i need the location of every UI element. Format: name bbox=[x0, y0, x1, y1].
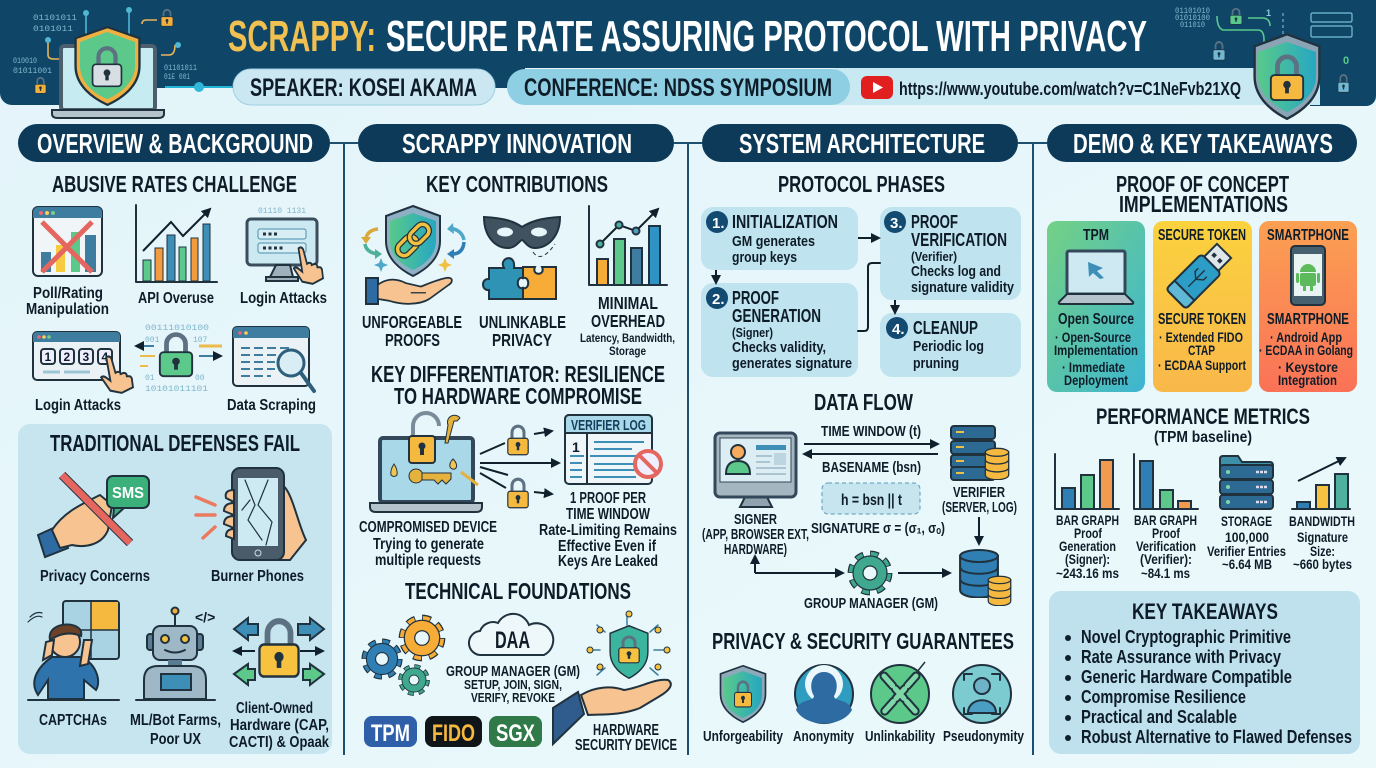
header banner bbox=[0, 0, 1376, 106]
label bbox=[1134, 512, 1197, 581]
icon: green lock with binary: 00111010100 bbox=[145, 324, 209, 333]
guarantee labels bbox=[703, 729, 1024, 745]
label: COMPROMISED DEVICE bbox=[359, 519, 497, 536]
label: STORAGE bbox=[1221, 513, 1272, 529]
icon: verifier server bbox=[951, 426, 1009, 480]
phase arrows bbox=[716, 238, 895, 331]
phase 1: initialization: 1. bbox=[712, 215, 725, 232]
icon: robot: </> bbox=[195, 609, 215, 625]
label: PROOFS bbox=[385, 330, 440, 350]
header banner: 1 bbox=[1266, 8, 1271, 18]
phase 3: proof verification bbox=[880, 207, 1021, 300]
card: secure token: SECURE TOKEN bbox=[1158, 311, 1246, 328]
card: secure token: · Extended FIDO bbox=[1159, 329, 1243, 345]
label: Burner Phones bbox=[211, 568, 304, 585]
icon: overhead chart bbox=[589, 206, 667, 285]
badge: TPM: TPM bbox=[371, 720, 410, 747]
icon: verifier log bbox=[565, 415, 661, 484]
label bbox=[446, 664, 580, 705]
header banner: 01101010 bbox=[1175, 7, 1210, 16]
icon: compromised laptop bbox=[370, 413, 482, 512]
icon: green lock with binary: 10101011101 bbox=[145, 385, 208, 394]
heading: key contributions: KEY CONTRIBUTIONS bbox=[426, 171, 608, 197]
icon: cracked burner phone bbox=[196, 468, 306, 560]
heading: performance metrics bbox=[1096, 404, 1310, 446]
heading: guarantees: PRIVACY & SECURITY GUARANTEES bbox=[712, 628, 1014, 654]
label: Login Attacks bbox=[35, 397, 121, 414]
panel: key takeaways: Novel Cryptographic Primitive bbox=[1081, 627, 1291, 647]
header banner: 01101011 bbox=[164, 64, 197, 73]
phase 1: initialization: group keys bbox=[732, 249, 797, 266]
icon: poll manipulation bbox=[33, 207, 102, 276]
phase 1: initialization bbox=[701, 207, 858, 270]
label bbox=[702, 511, 809, 558]
label: Manipulation bbox=[26, 301, 109, 318]
icon: android phone bbox=[1291, 246, 1325, 305]
badge: FIDO bbox=[425, 716, 482, 747]
hash formula box bbox=[822, 483, 920, 514]
icon: frustrated person captcha bbox=[28, 601, 119, 700]
icon: USB token bbox=[1166, 241, 1234, 309]
label: Storage bbox=[609, 346, 646, 358]
phase 3: proof verification: PROOF bbox=[911, 212, 958, 232]
label bbox=[130, 712, 221, 748]
icon: login keypad bbox=[33, 332, 133, 393]
icon: anonymity bbox=[795, 665, 853, 724]
label bbox=[1056, 512, 1119, 581]
icon: hardware security device bbox=[553, 611, 671, 744]
phase 4: cleanup: CLEANUP bbox=[913, 318, 978, 338]
icon: SMS hand bbox=[38, 475, 149, 557]
card: TPM: Open Source bbox=[1058, 311, 1134, 328]
label: Login Attacks bbox=[240, 290, 327, 307]
dividers between columns bbox=[330, 143, 1047, 755]
guarantee labels: Unforgeability bbox=[703, 729, 783, 745]
phase 1: initialization: INITIALIZATION bbox=[732, 212, 838, 232]
signature label: SIGNATURE σ = (σ₁, σₒ) bbox=[811, 520, 945, 537]
label: SECURITY DEVICE bbox=[575, 737, 677, 754]
card: TPM bbox=[1047, 221, 1145, 392]
column header: architecture bbox=[702, 124, 1018, 162]
label bbox=[26, 285, 109, 318]
label: Data Scraping bbox=[227, 397, 316, 414]
card: smartphone: · Android App bbox=[1270, 329, 1342, 345]
heading: technical foundations: TECHNICAL FOUNDATIONS bbox=[405, 578, 631, 604]
card: smartphone: Integration bbox=[1278, 372, 1337, 388]
badge: FIDO: FIDO bbox=[432, 720, 475, 747]
card: smartphone bbox=[1259, 221, 1357, 392]
arrows and locks to verifier log bbox=[480, 426, 559, 508]
phase 2: proof generation: 2. bbox=[712, 291, 725, 308]
label: (SERVER, LOG) bbox=[942, 499, 1017, 516]
chart: bandwidth bbox=[1292, 458, 1350, 509]
label: BAR GRAPH bbox=[1056, 512, 1119, 528]
label: TIME WINDOW bbox=[566, 506, 651, 523]
card: secure token: SECURE TOKEN bbox=[1158, 227, 1246, 244]
icon: robot bbox=[136, 608, 215, 700]
card: TPM: Implementation bbox=[1054, 342, 1138, 358]
phase 2: proof generation: GENERATION bbox=[732, 306, 821, 326]
label bbox=[362, 312, 462, 350]
label: Generation bbox=[1059, 538, 1116, 554]
icon: green lock with binary: 00 bbox=[195, 374, 205, 383]
label: SIGNER bbox=[734, 511, 777, 528]
header banner: 01011001 bbox=[13, 67, 52, 76]
icon: green lock with binary bbox=[136, 324, 222, 394]
heading: key differentiator bbox=[371, 361, 665, 409]
heading: proof of concept: PROOF OF CONCEPT bbox=[1116, 171, 1289, 197]
icon: unforgeability shield bbox=[720, 666, 766, 722]
speaker pill: SPEAKER: KOSEI AKAMA bbox=[250, 74, 477, 102]
label bbox=[359, 519, 497, 569]
label: BAR GRAPH bbox=[1134, 512, 1197, 528]
column header: overview bbox=[18, 124, 330, 162]
icon: DAA cloud: DAA bbox=[495, 627, 530, 654]
label: Latency, Bandwidth, bbox=[580, 333, 675, 345]
phase 2: proof generation: PROOF bbox=[732, 288, 779, 308]
icon: unlinkability bbox=[871, 662, 929, 723]
icon: data scraping bbox=[233, 327, 314, 391]
column header: innovation bbox=[358, 124, 674, 162]
icon: gears bbox=[365, 619, 441, 693]
header banner: 01E 001 bbox=[164, 73, 190, 82]
phase 2: proof generation: generates signature bbox=[732, 355, 852, 372]
youtube link: https://www.youtube.com/watch?v=C1NeFvb21XQ bbox=[899, 79, 1241, 99]
icon: green lock with binary: 107 bbox=[193, 336, 208, 345]
panel: key takeaways: Generic Hardware Compatible bbox=[1081, 667, 1292, 687]
phase 3: proof verification: signature validity bbox=[911, 279, 1015, 296]
data flow arrows and messages bbox=[804, 423, 938, 476]
heading: performance metrics: PERFORMANCE METRICS bbox=[1096, 404, 1310, 429]
label: ML/Bot Farms, bbox=[130, 712, 221, 729]
phase 2: proof generation bbox=[701, 283, 858, 377]
card: secure token: CTAP bbox=[1188, 342, 1215, 358]
label: Client-Owned bbox=[236, 700, 313, 717]
label: MINIMAL bbox=[598, 293, 658, 313]
guarantee labels: Pseudonymity bbox=[943, 729, 1024, 745]
label: API Overuse bbox=[138, 290, 214, 307]
card: TPM: · Immediate bbox=[1062, 359, 1125, 375]
label: multiple requests bbox=[375, 552, 481, 569]
label bbox=[1207, 513, 1286, 572]
label: BANDWIDTH bbox=[1289, 513, 1355, 529]
label: Effective Even if bbox=[558, 538, 657, 555]
hash formula box: h = bsn || t bbox=[841, 492, 903, 509]
icon: login monitor bbox=[247, 207, 323, 284]
label: VERIFIER bbox=[953, 484, 1005, 501]
label: 100,000 bbox=[1225, 529, 1269, 545]
header banner: 011010 bbox=[1180, 21, 1205, 30]
phase 2: proof generation: (Signer) bbox=[732, 326, 773, 340]
label: HARDWARE bbox=[593, 722, 659, 739]
label bbox=[580, 293, 675, 358]
label: ~243.16 ms bbox=[1056, 565, 1119, 581]
header banner: 0 bbox=[1343, 55, 1349, 67]
header banner: 01010100 bbox=[1175, 14, 1210, 23]
badge: SGX: SGX bbox=[496, 720, 535, 747]
label: Proof bbox=[1152, 525, 1180, 541]
phase 4: cleanup: pruning bbox=[913, 355, 959, 372]
icon: API chart bbox=[136, 205, 217, 282]
chart: proof verification bbox=[1134, 454, 1198, 509]
phase 3: proof verification: 3. bbox=[890, 215, 903, 232]
label: SETUP, JOIN, SIGN, bbox=[464, 677, 562, 692]
label: ~84.1 ms bbox=[1141, 565, 1190, 581]
icon: database bbox=[960, 550, 1011, 606]
label: PRIVACY bbox=[492, 330, 552, 350]
phase 3: proof verification: VERIFICATION bbox=[911, 230, 1007, 250]
label: CACTI) & Opaak bbox=[229, 734, 329, 751]
label bbox=[942, 484, 1017, 516]
title: SCRAPPY: bbox=[228, 12, 376, 61]
icon: mask and puzzle bbox=[483, 217, 560, 299]
panel: key takeaways: KEY TAKEAWAYS bbox=[1132, 599, 1278, 624]
title bbox=[228, 12, 1147, 61]
label: Hardware (CAP, bbox=[230, 717, 329, 734]
youtube link bbox=[861, 76, 1241, 99]
icon: green lock with binary: 01 bbox=[145, 374, 155, 383]
label: GROUP MANAGER (GM) bbox=[804, 595, 938, 612]
header banner: 0101011 bbox=[33, 25, 73, 34]
label: CAPTCHAs bbox=[39, 712, 107, 729]
group manager arrows bbox=[755, 517, 979, 573]
phase 4: cleanup bbox=[880, 313, 1021, 377]
heading: key differentiator: TO HARDWARE COMPROMISE bbox=[394, 383, 642, 409]
heading: abusive rates: ABUSIVE RATES CHALLENGE bbox=[52, 171, 297, 197]
icon: pseudonymity bbox=[953, 665, 1011, 723]
label: (Signer): bbox=[1065, 551, 1110, 567]
data flow arrows and messages: BASENAME (bsn) bbox=[822, 459, 921, 476]
icon: group manager gear bbox=[852, 555, 888, 591]
label: ~6.64 MB bbox=[1222, 556, 1272, 572]
phase 2: proof generation: Checks validity, bbox=[732, 339, 826, 356]
panel: key takeaways: Rate Assurance with Privacy bbox=[1081, 647, 1281, 667]
column header: overview: OVERVIEW & BACKGROUND bbox=[37, 128, 313, 159]
card: smartphone: · Keystore bbox=[1278, 359, 1338, 375]
label: Poll/Rating bbox=[33, 285, 103, 302]
panel: key takeaways: Practical and Scalable bbox=[1081, 707, 1237, 727]
phase 4: cleanup: 4. bbox=[892, 321, 905, 338]
label bbox=[575, 722, 677, 754]
label: HARDWARE) bbox=[724, 541, 787, 558]
label: 1 PROOF PER bbox=[570, 490, 646, 507]
label: UNLINKABLE bbox=[479, 312, 566, 332]
guarantee labels: Unlinkability bbox=[865, 729, 935, 745]
label bbox=[479, 312, 566, 350]
label: (Verifier): bbox=[1140, 551, 1192, 567]
icon: shield with gold lock bbox=[1255, 34, 1319, 119]
icon: laptop cursor bbox=[1059, 251, 1133, 304]
icon: laptop with green shield bbox=[52, 27, 164, 118]
label: GROUP MANAGER (GM) bbox=[446, 664, 580, 680]
label bbox=[539, 490, 677, 570]
conference pill: CONFERENCE: NDSS SYMPOSIUM bbox=[524, 74, 832, 102]
card: TPM: Deployment bbox=[1064, 372, 1128, 388]
icon: login keypad: 2 bbox=[64, 350, 70, 364]
icon: signer monitor bbox=[715, 433, 796, 507]
header banner: 01101011 bbox=[33, 14, 77, 23]
card: secure token: · ECDAA Support bbox=[1158, 357, 1246, 373]
conference pill bbox=[507, 69, 850, 105]
label: Proof bbox=[1074, 525, 1102, 541]
card: TPM: TPM bbox=[1083, 227, 1109, 244]
column header: innovation: SCRAPPY INNOVATION bbox=[402, 128, 632, 159]
chart: proof generation bbox=[1055, 454, 1119, 509]
icon: storage bbox=[1220, 456, 1273, 509]
label bbox=[229, 700, 329, 751]
data flow arrows and messages: TIME WINDOW (t) bbox=[821, 423, 921, 440]
icon: green lock with binary: 001 bbox=[145, 336, 160, 345]
heading: protocol phases: PROTOCOL PHASES bbox=[778, 171, 945, 197]
label: OVERHEAD bbox=[591, 311, 665, 331]
heading: performance metrics: (TPM baseline) bbox=[1154, 429, 1252, 446]
phase 3: proof verification: (Verifier) bbox=[911, 250, 957, 264]
panel: key takeaways: Compromise Resilience bbox=[1081, 687, 1246, 707]
icon: login monitor: 01110 1131 bbox=[258, 207, 306, 216]
heading: TRADITIONAL DEFENSES FAIL bbox=[50, 430, 300, 456]
label: Trying to generate bbox=[373, 536, 484, 553]
phase 1: initialization: GM generates bbox=[732, 233, 815, 250]
icon: login keypad: 1 bbox=[44, 350, 52, 364]
icon: unforgeable shield and hand bbox=[361, 206, 464, 304]
phase 3: proof verification: Checks log and bbox=[911, 263, 1001, 280]
heading: key differentiator: KEY DIFFERENTIATOR: RESILIENCE bbox=[371, 361, 665, 387]
label: Size: bbox=[1310, 543, 1335, 559]
card: smartphone: SMARTPHONE bbox=[1267, 227, 1349, 244]
icon: client-owned lock bbox=[234, 618, 324, 685]
card: TPM: · Open-Source bbox=[1055, 329, 1131, 345]
label: (APP, BROWSER EXT, bbox=[702, 526, 809, 543]
label: Rate-Limiting Remains bbox=[539, 522, 677, 539]
heading: proof of concept: IMPLEMENTATIONS bbox=[1119, 191, 1288, 217]
label: Verifier Entries bbox=[1207, 543, 1286, 559]
icon: DAA cloud bbox=[469, 614, 553, 655]
label: Keys Are Leaked bbox=[558, 553, 658, 570]
icon: verifier log: 1 bbox=[572, 439, 580, 455]
label: Verification bbox=[1136, 538, 1196, 554]
panel: traditional defenses fail bbox=[18, 424, 332, 754]
label: Privacy Concerns bbox=[40, 568, 150, 585]
label: Poor UX bbox=[150, 731, 201, 748]
icon: verifier log: VERIFIER LOG bbox=[571, 418, 646, 434]
label bbox=[1289, 513, 1355, 572]
icon: login keypad: 3 bbox=[82, 350, 90, 364]
label: VERIFY, REVOKE bbox=[471, 690, 555, 705]
icon: login keypad: 4 bbox=[102, 350, 108, 364]
column header: architecture: SYSTEM ARCHITECTURE bbox=[739, 128, 985, 159]
heading: proof of concept bbox=[1116, 171, 1289, 217]
label: Signature bbox=[1297, 529, 1348, 545]
label: ~660 bytes bbox=[1293, 556, 1352, 572]
heading: data flow: DATA FLOW bbox=[814, 389, 913, 415]
speaker pill bbox=[233, 69, 495, 105]
panel: key takeaways bbox=[1049, 591, 1360, 754]
phase 4: cleanup: Periodic log bbox=[913, 338, 984, 355]
card: secure token bbox=[1153, 221, 1252, 392]
label: UNFORGEABLE bbox=[362, 312, 462, 332]
icon: SMS hand: SMS bbox=[112, 485, 144, 502]
header banner: 010010 bbox=[13, 57, 37, 66]
guarantee labels: Anonymity bbox=[793, 729, 854, 745]
